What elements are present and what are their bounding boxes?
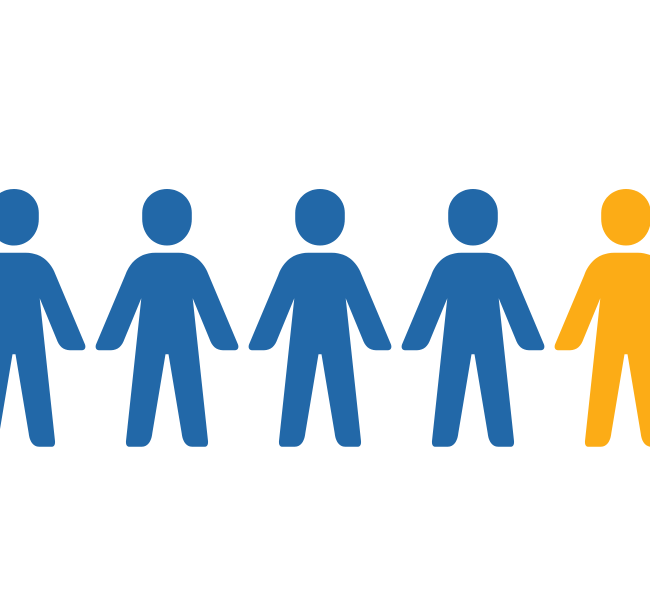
icon: blue person, cropped at left edge xyxy=(0,189,85,447)
icon: blue person 4 xyxy=(402,189,544,447)
icon: blue person 3 xyxy=(249,189,391,447)
icon: blue person 2 xyxy=(96,189,238,447)
icon: orange person, cropped at right edge xyxy=(555,189,650,447)
